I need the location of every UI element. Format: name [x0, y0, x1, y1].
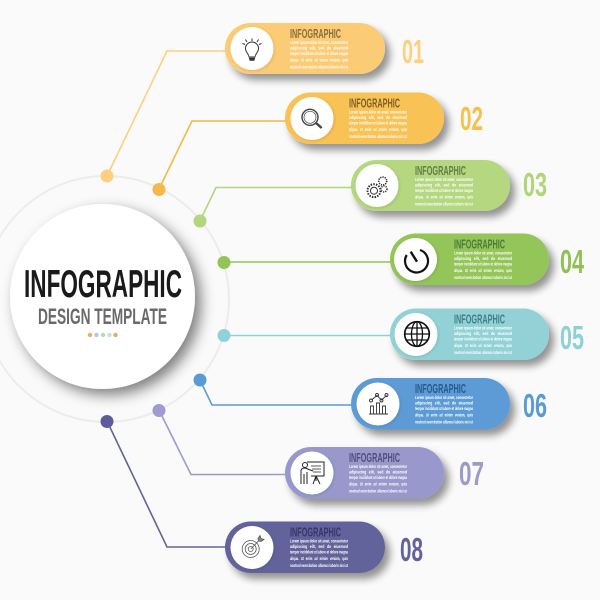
heading: INFOGRAPHIC	[349, 450, 400, 465]
body text: adipiscing elit, sed do eiusmod	[290, 544, 348, 549]
body text: adipiscing elit, sed do eiusmod	[349, 470, 407, 474]
body text: tempor incididunt ut labore et dolore magna	[349, 120, 407, 126]
node dots	[100, 170, 230, 428]
small dots	[88, 333, 118, 337]
body text: Lorem ipsum dolor sit amet, consectetur	[349, 464, 407, 469]
body text: aliqua. Ut enim ad minim veniam, quis	[454, 343, 512, 348]
panel: step 06	[351, 378, 510, 430]
heading: INFOGRAPHIC	[454, 236, 505, 252]
panel: step 05	[390, 308, 549, 360]
icon: bar chart	[369, 394, 388, 414]
body text: adipiscing elit, sed do eiusmod	[290, 46, 348, 50]
heading: INFOGRAPHIC	[290, 26, 341, 41]
icon: magnifier	[302, 109, 322, 128]
body text: nostrud exercitation ullamco laboris nisi ut	[349, 134, 407, 139]
central circle with title	[10, 204, 195, 389]
panel: step 01	[225, 23, 385, 74]
body text	[454, 326, 512, 355]
icon: timer	[405, 250, 428, 272]
body text: Lorem ipsum dolor sit amet, consectetur	[415, 177, 473, 182]
body text: aliqua. Ut enim ad minim veniam, quis	[415, 194, 473, 200]
body text	[290, 538, 348, 568]
panel: step 03	[351, 160, 510, 211]
body text: adipiscing elit, sed do eiusmod	[415, 182, 473, 188]
body text	[349, 464, 407, 494]
number 03: 03	[523, 166, 547, 203]
number 04: 04	[560, 243, 584, 280]
body text	[415, 177, 473, 206]
body text: nostrud exercitation ullamco laboris nisi ut	[454, 275, 512, 280]
body text: Lorem ipsum dolor sit amet, consectetur	[349, 110, 407, 114]
body text	[349, 110, 407, 139]
heading: INFOGRAPHIC	[290, 524, 341, 540]
body text	[290, 40, 348, 70]
subheading: DESIGN TEMPLATE	[38, 304, 167, 329]
icon: globe	[405, 322, 429, 346]
body text: tempor incididunt ut labore et dolore magna	[454, 262, 512, 266]
body text: aliqua. Ut enim ad minim veniam, quis	[454, 268, 512, 273]
icon: light bulb	[242, 38, 262, 60]
number 07: 07	[459, 455, 484, 492]
panel: step 07	[285, 447, 444, 499]
body text: tempor incididunt ut labore et dolore magna	[290, 51, 348, 56]
panel: step 08	[225, 522, 385, 573]
icon: target	[242, 536, 264, 558]
icon: presenter	[301, 462, 324, 484]
body text: adipiscing elit, sed do eiusmod	[454, 256, 512, 261]
number 02: 02	[460, 100, 483, 137]
body text: Lorem ipsum dolor sit amet, consectetur	[454, 250, 512, 256]
body text: adipiscing elit, sed do eiusmod	[349, 115, 407, 120]
body text: Lorem ipsum dolor sit amet, consectetur	[290, 538, 348, 544]
body text: Lorem ipsum dolor sit amet, consectetur	[290, 40, 348, 45]
body text: aliqua. Ut enim ad minim veniam, quis	[349, 482, 407, 486]
connector lines	[107, 51, 393, 547]
body text: tempor incididunt ut labore et dolore magna	[290, 550, 348, 554]
body text: nostrud exercitation ullamco laboris nisi ut	[415, 420, 473, 424]
heading: INFOGRAPHIC	[415, 381, 466, 396]
body text: nostrud exercitation ullamco laboris nisi ut	[290, 563, 348, 568]
body text: adipiscing elit, sed do eiusmod	[415, 400, 473, 406]
body text	[415, 395, 473, 424]
body text: nostrud exercitation ullamco laboris nisi ut	[454, 350, 512, 355]
body text	[454, 250, 512, 280]
body text: aliqua. Ut enim ad minim veniam, quis	[290, 58, 348, 62]
body text: Lorem ipsum dolor sit amet, consectetur	[454, 326, 512, 330]
body text: tempor incididunt ut labore et dolore magna	[415, 188, 473, 193]
body text: tempor incididunt ut labore et dolore magna	[349, 475, 407, 480]
body text: adipiscing elit, sed do eiusmod	[454, 331, 512, 336]
body text: aliqua. Ut enim ad minim veniam, quis	[349, 127, 407, 132]
body text: tempor incididunt ut labore et dolore magna	[415, 406, 473, 411]
heading: INFOGRAPHIC	[454, 312, 505, 326]
panel: step 04	[390, 234, 549, 285]
number 08: 08	[400, 531, 423, 568]
outer ring	[0, 176, 229, 422]
heading: INFOGRAPHIC	[415, 163, 466, 178]
heading: INFOGRAPHIC	[349, 96, 400, 110]
body text: nostrud exercitation ullamco laboris nisi ut	[415, 202, 473, 206]
body text: nostrud exercitation ullamco laboris nisi ut	[290, 64, 348, 70]
panel: step 02	[285, 92, 444, 144]
main heading: INFOGRAPHIC	[24, 263, 182, 306]
number 01: 01	[402, 33, 424, 70]
number 06: 06	[523, 387, 547, 424]
body text: aliqua. Ut enim ad minim veniam, quis	[290, 556, 348, 561]
body text: nostrud exercitation ullamco laboris nisi ut	[349, 488, 407, 494]
number 05: 05	[560, 319, 584, 356]
body text: aliqua. Ut enim ad minim veniam, quis	[415, 412, 473, 418]
body text: tempor incididunt ut labore et dolore magna	[454, 336, 512, 342]
icon: gears	[368, 177, 387, 197]
body text: Lorem ipsum dolor sit amet, consectetur	[415, 395, 473, 400]
